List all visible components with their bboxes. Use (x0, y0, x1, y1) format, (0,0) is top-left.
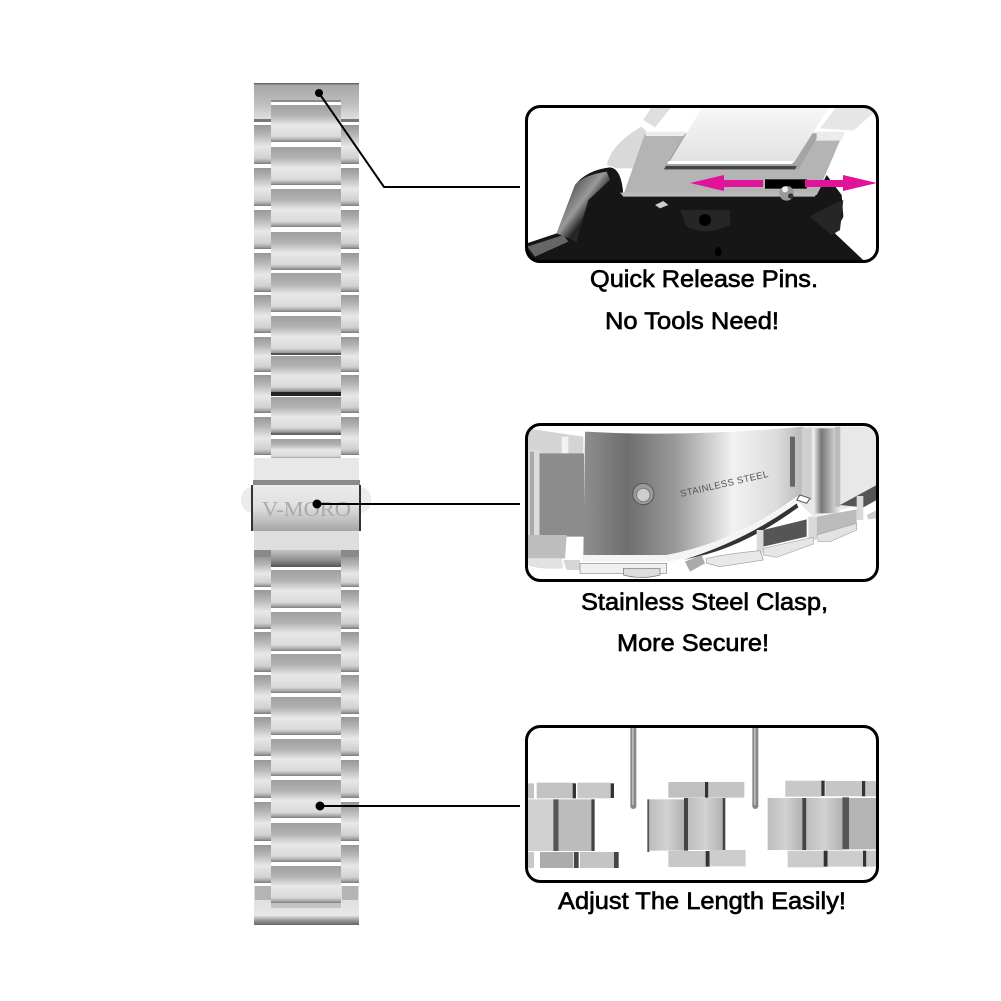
upper side links, right (341, 125, 359, 455)
link pins (630, 727, 758, 809)
caption: more secure: More Secure! (617, 630, 769, 657)
panel: adjust the length (525, 725, 879, 883)
upper side links, left (254, 125, 271, 455)
border (526, 424, 878, 580)
metal watch band (241, 83, 371, 925)
leader line: quick release pins (315, 89, 520, 187)
clasp lower link (254, 550, 359, 567)
bottom end link (254, 886, 359, 925)
lower side links, left (254, 557, 271, 883)
engraved text: STAINLESS STEEL (679, 469, 769, 500)
left link segment (527, 783, 619, 868)
caption: no tools: No Tools Need! (605, 308, 779, 335)
border (526, 726, 878, 882)
lower side links, right (341, 557, 359, 883)
caption: quick release pins: Quick Release Pins. (590, 266, 818, 293)
upper centre links (271, 105, 341, 459)
middle link segment (647, 782, 746, 867)
panel: stainless steel clasp (525, 423, 879, 582)
arrow: left (690, 175, 763, 191)
panel: quick release pins (525, 105, 879, 263)
caption: stainless steel clasp: Stainless Steel Clasp, (581, 589, 828, 616)
right link segment (768, 781, 879, 867)
leader line: adjust length (316, 802, 520, 810)
clasp logo: V-MORO (262, 497, 351, 521)
clasp cover (241, 458, 371, 550)
dark link gaps (271, 353, 341, 435)
top end link (254, 83, 359, 122)
leader line: clasp (312, 500, 520, 508)
border (526, 106, 878, 262)
caption: adjust the length: Adjust The Length Easily! (558, 888, 846, 915)
arrow: right (805, 175, 877, 191)
lower centre links (271, 570, 341, 903)
